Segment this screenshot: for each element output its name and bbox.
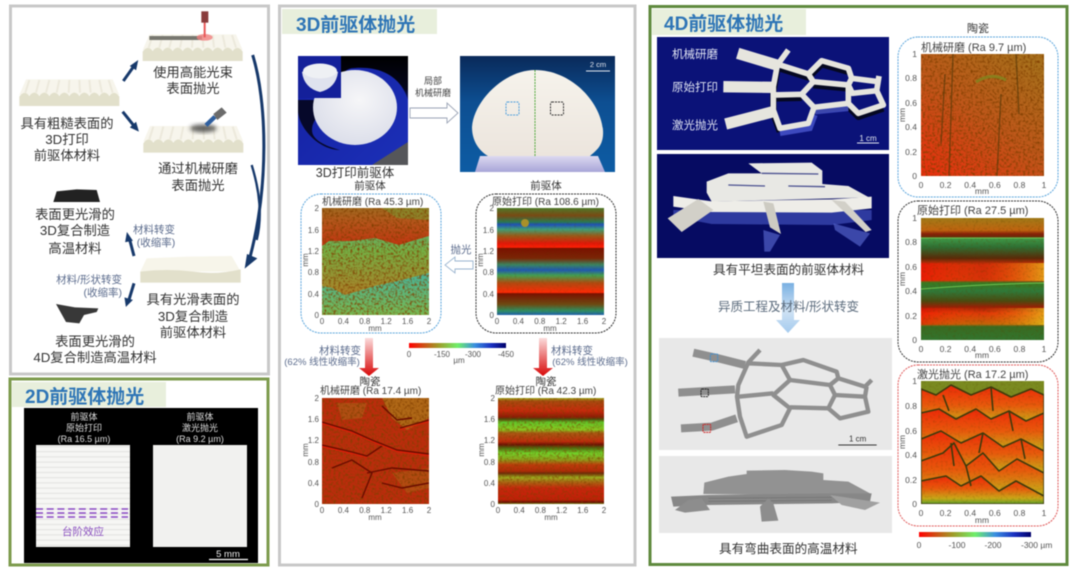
height map: ceramic grinding: 0 (315, 500, 320, 509)
height map: ceramic printed: 2 (602, 506, 607, 515)
photo: precursor lattice side view (657, 154, 889, 258)
height map: laser 4D: 1 (1042, 508, 1047, 518)
height map: precursor grinding: 0.8 (359, 317, 371, 326)
caption: laser: (Ra 9.2 µm) (176, 434, 224, 444)
height map: ceramic printed: 1.6 (484, 415, 496, 424)
height map: precursor printed: 1.6 (577, 317, 589, 326)
text: material conversion: (收缩率) (137, 236, 175, 249)
marker: blue (710, 354, 718, 362)
label: right conversion: (62% 线性收缩率) (552, 356, 628, 368)
text: mechanical polishing (158, 161, 238, 193)
legend: height colorbar (407, 343, 515, 365)
height map: ceramic grinding: 2 (427, 506, 432, 515)
chart title: ceramic grinding: 机械研磨 (Ra 17.4 µm) (320, 384, 421, 397)
labels: surface states: 激光抛光 (672, 118, 718, 132)
height map: ceramic grinding: 1.2 (381, 506, 392, 515)
rough 3D printed precursor block (19, 79, 119, 106)
legend: 4D colorbar (917, 532, 1052, 550)
arrow: heterogeneous engineering (776, 283, 800, 333)
height map: grinding 4D: 0.6 (989, 180, 1001, 190)
arrow: left conversion (359, 338, 379, 376)
label: left conversion (284, 344, 361, 368)
text: 4D ceramic: 4D复合制造高温材料 (33, 349, 157, 365)
height map: ceramic grinding: 0.8 (308, 458, 320, 467)
text: mechanical polishing: 表面抛光 (171, 178, 225, 193)
height map: ceramic grinding: mm (301, 443, 310, 457)
panel: surface polishing workflow (10, 6, 268, 374)
height map: ceramic grinding: 1.2 (308, 436, 320, 445)
height map: precursor printed: 0 (490, 311, 495, 320)
text: smooth precursor: 具有光滑表面的 (146, 292, 240, 307)
height map: laser 4D: 0.4 (905, 450, 917, 460)
height map: printed 4D: 0.2 (905, 311, 917, 321)
height map: laser 4D: 0.2 (905, 475, 917, 485)
text: rough precursor: 前驱体材料 (34, 147, 100, 163)
frame: printed 4D (898, 201, 1058, 362)
laser polished block (143, 11, 243, 61)
height map: grinding 4D: mm (975, 186, 989, 196)
height map: precursor grinding: 2 (427, 317, 432, 326)
text: 3D ceramic: 高温材料 (48, 240, 102, 256)
height map: grinding 4D: 0 (912, 171, 917, 181)
black 4D ceramic shape (56, 304, 98, 323)
text: 3D ceramic: 3D复合制造 (40, 223, 110, 238)
height map: ceramic printed: 1.2 (484, 436, 496, 445)
frame: mechanical grinding (301, 194, 441, 333)
height map: grinding 4D: 0 (919, 180, 924, 190)
labels: surface states (672, 47, 718, 132)
label: ceramic left: 陶瓷 (360, 375, 380, 388)
height map: printed 4D: mm (975, 350, 989, 360)
height map: ceramic grinding: 0.8 (359, 506, 371, 515)
label: local grinding (415, 75, 451, 98)
height map: precursor grinding: 1.6 (308, 226, 320, 235)
height map: ceramic printed: 2 (491, 394, 496, 403)
photo: ceramic lattice top view (659, 338, 892, 450)
height map: laser 4D: mm (975, 515, 989, 525)
label: stair-step effect: 台阶效应 (62, 525, 104, 538)
caption: laser: 前驱体 (186, 411, 214, 422)
arrow: to mechanical grinding (123, 112, 139, 131)
height map: grinding 4D: 1 (912, 49, 917, 59)
chart title: grinding 4D: 机械研磨 (Ra 9.7 µm) (921, 40, 1026, 54)
height map: laser 4D: 1 (912, 376, 917, 386)
panel: 3D precursor polishing (280, 6, 635, 565)
frame: laser 4D (898, 365, 1058, 526)
height map: precursor printed: 1.2 (556, 317, 567, 326)
height map: precursor grinding: mm (301, 253, 310, 267)
height map: printed 4D: 0.2 (940, 344, 952, 354)
height map: precursor printed: 0.4 (513, 317, 525, 326)
label: precursor right: 前驱体 (530, 179, 562, 192)
heading: 4D: 4D前驱体抛光 (664, 13, 783, 35)
text: smooth precursor: 前驱体材料 (160, 324, 226, 340)
height map: printed 4D: mm (897, 272, 907, 286)
text: smooth precursor (146, 292, 240, 340)
height map: ceramic grinding: 1.6 (308, 415, 320, 424)
height map: laser 4D: 0.6 (905, 426, 917, 436)
height map: grinding 4D: 0.8 (905, 73, 917, 83)
label: ceramic: 陶瓷 (967, 21, 989, 35)
marker: ground area (506, 102, 519, 115)
height map: printed 4D: 0.6 (989, 344, 1001, 354)
height map: laser 4D: mm (897, 435, 907, 449)
smooth composite precursor block (140, 256, 241, 283)
caption: laser (176, 411, 224, 444)
height map: laser 4D: 0.6 (989, 508, 1001, 518)
height map: laser 4D: 0.8 (1013, 508, 1026, 518)
caption: printed (58, 411, 110, 444)
lattice in top view (723, 50, 883, 133)
height map: ceramic grinding: mm (368, 513, 382, 522)
text: smooth precursor: 3D复合制造 (158, 309, 228, 324)
height map: printed 4D: 0.8 (1013, 344, 1026, 354)
caption: laser: 激光抛光 (182, 422, 218, 433)
black 3D ceramic block (53, 189, 100, 202)
height map: precursor grinding: 1.6 (402, 317, 414, 326)
printed square (36, 445, 130, 547)
label: right conversion: 材料转变 (551, 344, 593, 357)
height map: grinding 4D: mm (897, 108, 907, 122)
marker: black (701, 389, 708, 397)
height map: precursor printed: 1.6 (483, 226, 495, 235)
height map: precursor printed: 2 (490, 204, 495, 213)
height map: precursor grinding: 0.4 (308, 290, 320, 299)
frame: grinding 4D (898, 37, 1058, 197)
legend: 4D colorbar: -300 µm (1021, 540, 1052, 550)
height map: ceramic printed: 1.2 (556, 506, 568, 515)
scale bar: 5 mm (216, 549, 240, 560)
text: material conversion (133, 223, 175, 249)
scale bar: 1 cm (849, 435, 867, 444)
height map: printed 4D: 1 (1042, 344, 1047, 354)
text: laser polishing: 使用高能光束 (153, 64, 233, 80)
caption: printed: 前驱体 (70, 411, 98, 422)
panel: 4D precursor polishing (650, 6, 1067, 564)
height map: ceramic printed: 0 (491, 500, 496, 509)
height map: grinding 4D (897, 49, 1047, 196)
photo: 2D samples (24, 408, 258, 563)
height map: precursor printed (476, 204, 607, 333)
label: heterogeneous engineering: 异质工程及材料/形状转变 (718, 299, 859, 314)
caption: 3D printed precursor: 3D打印前驱体 (316, 165, 395, 180)
height map: laser 4D: 0.8 (905, 401, 917, 411)
scale bar: 2 cm (586, 60, 610, 71)
legend: 4D colorbar: 0 (917, 540, 922, 550)
height map: laser 4D: 0 (919, 508, 924, 518)
label: precursor left: 前驱体 (354, 179, 386, 192)
heading: 2D: 2D前驱体抛光 (25, 386, 144, 408)
height map: precursor printed: 0.8 (534, 317, 546, 326)
height map: grinding 4D: 0.4 (905, 122, 917, 132)
legend: height colorbar: -150 (434, 350, 451, 359)
height map: grinding 4D: 0.6 (905, 98, 917, 108)
labels: surface states: 原始打印 (672, 80, 718, 94)
height map: laser 4D: 0 (912, 499, 917, 509)
arrow: to laser polishing (123, 60, 138, 81)
text: laser polishing: 表面抛光 (166, 81, 220, 96)
height map: grinding 4D: 0.8 (1013, 180, 1026, 190)
photo: ceramic lattice side view (659, 456, 892, 533)
legend: height colorbar: µm (453, 356, 465, 365)
height map: ceramic grinding: 0.4 (338, 506, 350, 515)
height map: precursor grinding: 0.8 (308, 268, 320, 277)
height map: printed 4D: 1 (912, 213, 917, 223)
text: material conversion: 材料转变 (133, 223, 175, 236)
arrow: to 4D ceramic (125, 283, 134, 307)
scale bar: 1 cm: 1 cm (859, 134, 877, 143)
caption: printed: 原始打印 (66, 422, 102, 433)
height map: printed 4D: 0 (912, 335, 917, 345)
caption: curved ceramic: 具有弯曲表面的高温材料 (719, 541, 858, 556)
label: local grinding: 机械研磨 (415, 87, 451, 98)
height map: ceramic printed: 0.8 (535, 506, 547, 515)
height map: ceramic printed (477, 394, 607, 522)
photo: precursor lattice top view (657, 37, 889, 150)
arrow: polishing (445, 257, 473, 273)
height map: precursor printed: 2 (602, 317, 607, 326)
label: polishing: 抛光 (450, 243, 472, 256)
height map: precursor grinding: 1.2 (381, 317, 392, 326)
text: laser polishing (153, 64, 233, 96)
height map: laser 4D: 0.4 (964, 508, 976, 518)
heading: 3D: 3D前驱体抛光 (296, 14, 415, 36)
height map: precursor printed: 0.8 (483, 268, 495, 277)
height map: ceramic grinding (301, 394, 432, 522)
height map: printed 4D (897, 213, 1047, 360)
legend: height colorbar: 0 (407, 350, 412, 359)
height map: ceramic grinding: 0 (320, 506, 325, 515)
height map: precursor grinding: 0.4 (338, 317, 350, 326)
arrow: local grinding (410, 103, 458, 123)
text: 3D ceramic (35, 207, 115, 256)
height map: printed 4D: 0.8 (905, 237, 917, 247)
caption: flat precursor: 具有平坦表面的前驱体材料 (713, 262, 865, 277)
scale bar (209, 549, 248, 560)
label: local grinding: 局部 (424, 75, 442, 86)
height map: grinding 4D: 0.2 (905, 147, 917, 157)
height map: grinding 4D: 0.4 (964, 180, 976, 190)
scale bar (838, 435, 877, 445)
height map: printed 4D: 0.4 (964, 344, 976, 354)
arrow: right conversion (533, 338, 553, 376)
caption: printed: (Ra 16.5 µm) (58, 434, 110, 444)
label: left conversion: (62% 线性收缩率) (284, 356, 360, 368)
label: left conversion: 材料转变 (319, 344, 361, 357)
text: 4D ceramic (33, 334, 157, 365)
legend: 4D colorbar: -100 (948, 540, 966, 550)
labels: surface states: 机械研磨 (672, 47, 718, 61)
height map: precursor grinding: mm (368, 324, 382, 333)
height map: precursor grinding (301, 204, 432, 333)
height map: laser 4D: 0.2 (940, 508, 952, 518)
height map: ceramic grinding: 1.6 (402, 506, 414, 515)
photo: 3D printed precursor (298, 56, 408, 165)
height map: printed 4D: 0.6 (905, 262, 917, 272)
height map: precursor printed: mm (476, 253, 485, 267)
chart title: printed 4D: 原始打印 (Ra 27.5 µm) (917, 203, 1028, 217)
scale bar: 2 cm: 2 cm (590, 60, 606, 69)
legend: 4D colorbar: -200 (984, 540, 1002, 550)
diagram: workflow shapes and arrows (19, 11, 264, 323)
text: 4D ceramic: 表面更光滑的 (55, 334, 135, 349)
height map: precursor printed: 0.4 (483, 290, 495, 299)
height map: grinding 4D: 1 (1042, 180, 1047, 190)
height map: precursor printed: mm (543, 324, 557, 333)
height map: ceramic grinding: 0.4 (308, 479, 320, 488)
height map: precursor printed: 1.2 (483, 247, 495, 256)
height map: printed 4D: 0.4 (905, 286, 917, 296)
height map: ceramic printed: 0.4 (514, 506, 525, 515)
height map: grinding 4D: 0.2 (940, 180, 952, 190)
height map: precursor grinding: 1.2 (308, 247, 320, 256)
chart title: precursor grinding: 机械研磨 (Ra 45.3 µm) (322, 195, 423, 208)
photo: ground dome (460, 56, 615, 172)
frame: original print (476, 194, 616, 333)
legend: height colorbar: -300 (465, 350, 482, 359)
marker: red (703, 424, 711, 432)
mechanically ground block (143, 107, 243, 153)
height map: ceramic printed: mm (544, 513, 558, 522)
arrow: to 3D ceramic (125, 232, 134, 256)
chart title: ceramic printed: 原始打印 (Ra 42.3 µm) (495, 384, 596, 397)
height map: ceramic printed: 0 (496, 506, 501, 515)
laser polished square (153, 445, 247, 547)
chart title: laser 4D: 激光抛光 (Ra 17.2 µm) (917, 367, 1028, 381)
height map: ceramic printed: 1.6 (577, 506, 589, 515)
text: rough precursor: 具有粗糙表面的 (20, 116, 114, 131)
stair-step dashes (36, 509, 128, 517)
text: material and shape conversion: 材料/形状转变 (56, 273, 122, 286)
height map: ceramic printed: mm (477, 443, 486, 457)
arrow: curved to smooth precursor (245, 55, 264, 269)
panel: 2D precursor polishing (10, 379, 268, 565)
height map: ceramic printed: 0.8 (484, 458, 496, 467)
height map: precursor grinding: 0 (320, 317, 325, 326)
marker: printed area (550, 102, 564, 115)
height map: printed 4D: 0 (919, 344, 924, 354)
height map: laser 4D (897, 376, 1047, 525)
text: material and shape conversion: (收缩率) (84, 286, 122, 299)
label: right conversion (551, 344, 628, 368)
text: material and shape conversion (56, 273, 122, 299)
height map: ceramic grinding: 2 (315, 394, 320, 403)
legend: height colorbar: -450 (498, 350, 515, 359)
label: ceramic right: 陶瓷 (536, 375, 556, 388)
height map: precursor grinding: 2 (315, 204, 320, 213)
text: 3D ceramic: 表面更光滑的 (35, 207, 115, 222)
height map: precursor printed: 0 (495, 317, 500, 326)
height map: ceramic printed: 0.4 (484, 479, 496, 488)
text: mechanical polishing: 通过机械研磨 (158, 161, 238, 176)
height map: precursor grinding: 0 (315, 311, 320, 320)
text: rough precursor (20, 116, 114, 163)
text: rough precursor: 3D打印 (45, 132, 89, 147)
chart title: precursor printed: 原始打印 (Ra 108.6 µm) (492, 195, 599, 208)
